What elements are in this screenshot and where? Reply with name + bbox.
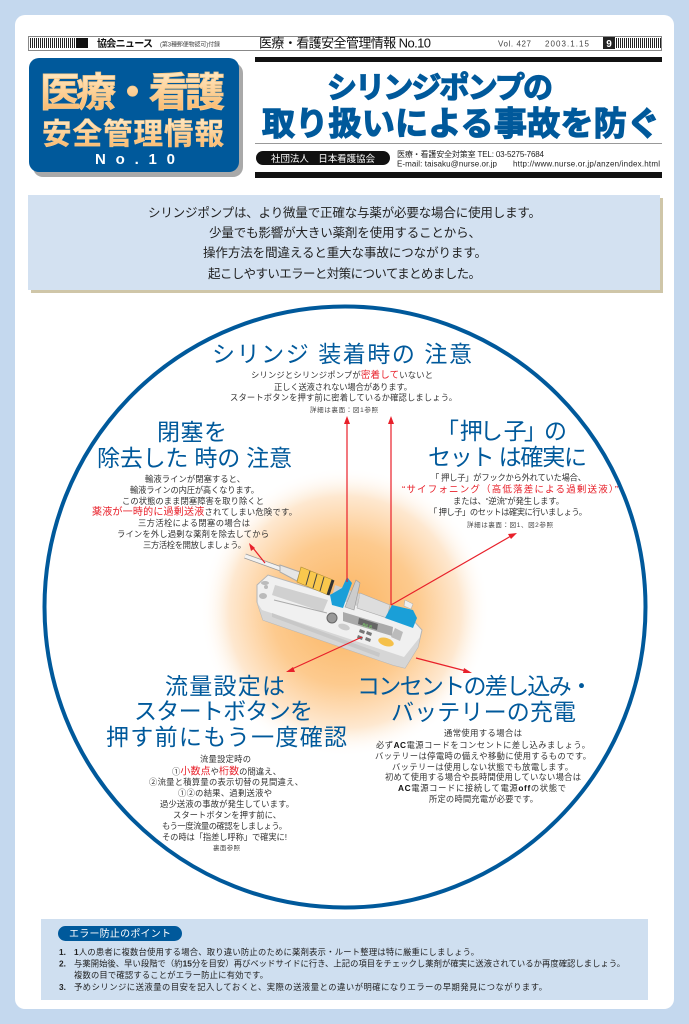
- section: flow setting: スタートボタンを: [134, 698, 313, 724]
- section: outlet and battery: バッテリーの充電: [391, 699, 576, 725]
- glow behind pump: [200, 467, 490, 757]
- section: flow setting: 流量設定時の: [200, 754, 251, 764]
- publisher bar: 社団法人 日本看護協会: [271, 153, 375, 165]
- publisher bar: http://www.nurse.or.jp/anzen/index.html: [513, 160, 660, 168]
- section: outlet and battery: 必ずAC電源コードをコンセントに差し込みましょう。: [376, 740, 590, 750]
- section: occlusion: 除去した 時の 注意: [97, 445, 292, 471]
- section: pusher: 「 押し子」のセットは確実に行いましょう。: [429, 507, 587, 517]
- section: occlusion: 薬液が一時的に過剰送液されてしまい危険です。: [92, 505, 297, 518]
- error prevention panel: [41, 919, 648, 1000]
- error prevention panel: 予めシリンジに送液量の目安を記入しておくと、実際の送液量との違いが明確になりエラーの早期発見につながります。: [74, 982, 547, 992]
- publisher bar: [255, 149, 662, 178]
- intro panel: シリンジポンプは、より微量で正確な与薬が必要な場合に使用します。: [148, 205, 541, 220]
- section: occlusion: 三方活栓による閉塞の場合は: [138, 518, 250, 528]
- badge: error prevention points: [58, 926, 182, 941]
- syringe pump illustration: [245, 556, 422, 668]
- publisher bar: 医療・看護安全対策室 TEL: 03-5275-7684: [397, 149, 545, 159]
- section: pusher: 「 押し 子」の: [436, 418, 567, 444]
- logo badge: 安全管理情報: [42, 118, 224, 151]
- section: occlusion: 三方活栓を開放しましょう。: [143, 540, 246, 550]
- section: occlusion: [92, 419, 297, 550]
- section: outlet and battery: バッテリーは使用しない状態でも放電します。: [392, 762, 573, 772]
- section: pusher: 詳細は裏面：図1、図2参照: [467, 520, 554, 529]
- section: flow setting: [106, 673, 347, 852]
- section: syringe mounting: 詳細は裏面：図1参照: [310, 405, 378, 414]
- masthead strip: (第3種郵便物認可)付録: [160, 40, 220, 48]
- arrows from pump to sections: [249, 416, 517, 673]
- section: syringe mounting: [212, 341, 472, 414]
- section: flow setting: 裏面参照: [213, 843, 240, 852]
- section: outlet and battery: 通常使用する場合は: [444, 728, 522, 738]
- section: outlet and battery: コンセントの差し込み・: [357, 673, 593, 699]
- error prevention panel: 3.: [59, 982, 66, 992]
- masthead strip: 2003.1.15: [545, 40, 590, 48]
- section: pusher: セット は確実に: [428, 444, 587, 470]
- section: occlusion: 閉塞を: [157, 419, 227, 445]
- masthead strip: [28, 36, 662, 50]
- section: flow setting: 押す前にもう一度確認: [106, 724, 347, 750]
- main title: 取り扱いによる事故を防ぐ: [262, 105, 660, 142]
- section: flow setting: もう一度流量の確認をしましょう。: [162, 821, 287, 831]
- section: syringe mounting: スタートボタンを押す前に密着しているか確認しましょう。: [230, 392, 457, 402]
- large circle frame: [44, 306, 646, 908]
- masthead strip: 協会ニュース: [97, 37, 153, 50]
- section: outlet and battery: 所定の時間充電が必要です。: [429, 794, 538, 804]
- section: pusher: または、“逆流”が発生します。: [453, 496, 564, 506]
- section: flow setting: 過少送液の事故が発生しています。: [160, 799, 294, 809]
- section: syringe mounting: シリンジとシリンジポンプが密着していないと: [251, 369, 433, 381]
- logo badge: [29, 58, 243, 177]
- error prevention panel: 与薬開始後、早い段階で（約15分を目安）再びベッドサイドに行き、上記の項目をチェックし薬剤が確実に送液されているか再度確認しましょう。: [74, 958, 625, 968]
- syringe pump illustration: 88.8: [361, 622, 373, 631]
- section: outlet and battery: AC電源コードに接続して電源offの状態で: [398, 783, 566, 793]
- section: flow setting: スタートボタンを押す前に、: [173, 810, 281, 820]
- badge: error prevention points: エラー防止のポイント: [69, 927, 171, 940]
- section: pusher: “サイフォニング（高低落差による過剰送液）”: [402, 484, 618, 496]
- main title: [255, 57, 662, 144]
- section: flow setting: ①小数点や桁数の間違え、: [172, 764, 281, 778]
- section: occlusion: 輸液ラインの内圧が高くなります。: [130, 485, 259, 495]
- publisher bar: E-mail: taisaku@nurse.or.jp: [397, 160, 498, 168]
- error prevention panel: 2.: [59, 958, 66, 968]
- error prevention panel: 複数の目で確認することがエラー防止に有効です。: [74, 970, 268, 980]
- section: flow setting: ①②の結果、過剰送液や: [178, 788, 272, 798]
- intro panel: 起こしやすいエラーと対策についてまとめました。: [208, 266, 481, 281]
- masthead strip: Vol. 427: [498, 40, 532, 48]
- intro panel: 少量でも影響が大きい薬剤を使用することから、: [209, 225, 481, 240]
- masthead strip: 医療・看護安全管理情報 No.10: [259, 36, 431, 50]
- section: outlet and battery: バッテリーは停電時の備えや移動に使用するものです。: [375, 751, 591, 761]
- section: flow setting: ②流量と積算量の表示切替の見間違え、: [149, 777, 303, 787]
- section: outlet and battery: [357, 673, 593, 804]
- section: outlet and battery: 初めて使用する場合や長時間使用していない場合は: [385, 772, 581, 782]
- main title: シリンジポンプの: [327, 72, 553, 105]
- section: occlusion: 輸液ラインが閉塞すると、: [145, 474, 245, 484]
- section: occlusion: ラインを外し過剰な薬剤を除去してから: [117, 529, 269, 539]
- error prevention panel: 1.: [59, 947, 66, 957]
- section: pusher: 「 押し子」がフックから外れていた場合、: [431, 472, 586, 482]
- logo badge: 医療・看護: [40, 71, 225, 115]
- error prevention panel: 1人の患者に複数台使用する場合、取り違い防止のために薬剤表示・ルート整理は特に厳重にしましょう。: [74, 947, 479, 957]
- section: occlusion: この状態のまま閉塞障害を取り除くと: [122, 496, 264, 506]
- section: syringe mounting: シリンジ 装着時の 注意: [212, 341, 472, 367]
- masthead strip: 9: [606, 39, 612, 50]
- section: flow setting: 流量設定は: [165, 673, 285, 699]
- section: pusher: [402, 418, 618, 529]
- section: flow setting: その時は「指差し呼称」で確実に!: [162, 832, 287, 842]
- intro panel: [28, 195, 663, 293]
- logo badge: No.10: [95, 151, 175, 168]
- section: syringe mounting: 正しく送液されない場合があります。: [274, 382, 412, 392]
- intro panel: 操作方法を間違えると重大な事故につながります。: [203, 245, 487, 260]
